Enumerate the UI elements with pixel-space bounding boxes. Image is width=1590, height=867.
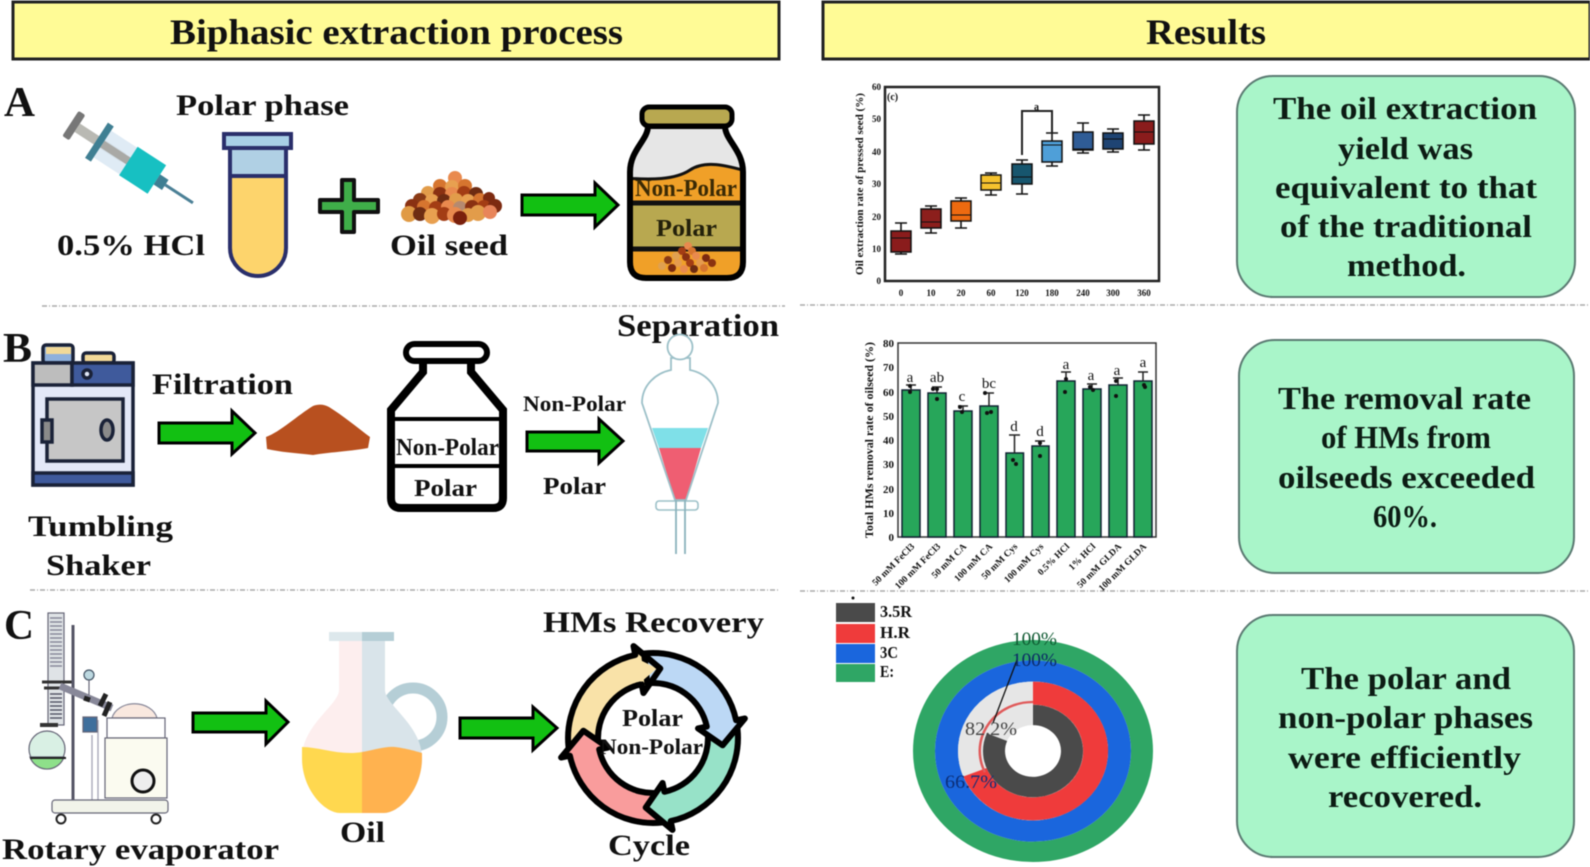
y ticks: 30 (872, 179, 882, 189)
x ticks: 10 (926, 288, 936, 298)
x ticks: 240 (1076, 288, 1090, 298)
x labels: 100 mM CA (953, 542, 995, 584)
y axis label: Total HMs removal rate of oilseed (%) (862, 342, 876, 538)
y ticks: 0 (876, 276, 882, 286)
y ticks: 70 (883, 362, 894, 374)
x ticks: 120 (1015, 288, 1029, 298)
icon: oil jug (302, 632, 442, 813)
icon: plus (320, 180, 378, 232)
header: biphasic extraction process: Biphasic extraction process (170, 12, 623, 52)
label: polar: Polar (543, 474, 606, 500)
x labels: 50 mM Cys (980, 542, 1020, 582)
significance letters: a (1114, 363, 1121, 379)
x labels (871, 542, 1149, 594)
icon: jar with phases (625, 107, 750, 285)
legend (836, 596, 913, 682)
panel B: filtration and separation (3, 307, 779, 582)
label: tumbling shaker: Shaker (46, 549, 151, 582)
icon: separatory funnel (642, 334, 718, 554)
callout: phase recovery: recovered. (1328, 778, 1482, 814)
legend: E: (880, 662, 894, 681)
callout: HMs removal: of HMs from (1321, 419, 1491, 455)
y axis label: Oil extraction rate of pressed seed (%) (855, 93, 866, 275)
label: filtration: Filtration (152, 368, 293, 401)
rings (924, 650, 1142, 852)
error bars (906, 372, 1148, 453)
y ticks (872, 82, 882, 286)
arrow (460, 707, 557, 750)
callout: HMs removal: 60%. (1373, 498, 1437, 534)
legend: 3.5R (880, 602, 913, 621)
significance letters: ab (930, 370, 944, 386)
x ticks: 0 (899, 288, 904, 298)
icon: tumbling shaker (33, 345, 133, 485)
icon: jar with phases: Polar (656, 216, 717, 242)
callout: HMs removal (1239, 340, 1574, 573)
y ticks: 60 (872, 82, 882, 92)
legend: 3C (880, 643, 898, 662)
arrow (527, 419, 623, 463)
icon: bottle: Polar (414, 476, 477, 502)
x labels: 50 mM CA (930, 542, 969, 581)
label: cycle: Cycle (608, 829, 690, 862)
callout: oil extraction yield: of the traditional (1280, 208, 1532, 244)
legend: H.R (880, 623, 911, 642)
icon: bottle: Non-Polar (396, 435, 499, 461)
value labels: 82.2% (965, 719, 1017, 740)
y ticks: 20 (872, 212, 882, 222)
icon: powder pile (266, 405, 370, 455)
radial chart: recovery rates (836, 596, 1142, 852)
bar chart: HMs removal rate (862, 338, 1156, 594)
significance letters: d (1036, 424, 1044, 440)
callout: HMs removal: oilseeds exceeded (1278, 459, 1535, 495)
label: oil seed: Oil seed (390, 229, 508, 262)
significance bracket: a (1034, 102, 1039, 113)
y ticks: 0 (888, 532, 894, 544)
y ticks: 50 (883, 411, 894, 423)
callout: oil extraction yield: equivalent to that (1275, 169, 1537, 205)
x ticks: 300 (1106, 288, 1120, 298)
callout: phase recovery: were efficiently (1288, 739, 1521, 775)
y ticks: 60 (883, 387, 894, 399)
x ticks (899, 288, 1151, 298)
panel tag: (c) (887, 92, 898, 103)
seeds in jar (658, 242, 716, 273)
x labels: 50 mM FeCl3 (871, 542, 917, 588)
label C: C (4, 603, 34, 649)
callout: phase recovery: non-polar phases (1278, 699, 1533, 735)
arrow (159, 411, 255, 454)
significance letters: a (1088, 368, 1095, 384)
value labels: 100% (1012, 629, 1057, 650)
value labels: 100% (1012, 650, 1057, 671)
icon: jar with phases: Non-Polar (635, 176, 737, 202)
icon: syringe (59, 106, 204, 220)
icon: rotary evaporator (29, 613, 168, 824)
y ticks: 20 (883, 484, 894, 496)
box plot: oil extraction rate (855, 82, 1159, 298)
label: HCl: 0.5% HCl (57, 229, 205, 262)
callout: phase recovery (1237, 615, 1574, 857)
label: non-polar: Non-Polar (523, 391, 626, 416)
boxes (891, 115, 1154, 254)
significance letters: bc (982, 376, 996, 392)
x ticks: 360 (1137, 288, 1151, 298)
label: oil: Oil (340, 816, 385, 849)
y ticks (883, 338, 894, 544)
callout: oil extraction yield: The oil extraction (1273, 90, 1537, 126)
data points (908, 377, 1147, 466)
x labels: 100 mM Cys (1003, 542, 1046, 585)
label: cycle center text: Polar (622, 706, 683, 732)
significance letters (907, 355, 1147, 440)
value labels: 66.7% (945, 772, 997, 793)
significance letters: a (1063, 357, 1070, 373)
label: cycle center text: Non-Polar (600, 734, 703, 759)
callout: oil extraction yield (1237, 76, 1575, 297)
y ticks: 50 (872, 114, 882, 124)
label B: B (3, 326, 32, 372)
label: separation: Separation (617, 307, 779, 343)
arrow (522, 183, 618, 227)
callout: oil extraction yield: yield was (1338, 130, 1473, 166)
y ticks: 10 (883, 508, 894, 520)
header: results (823, 2, 1590, 59)
x ticks: 60 (986, 288, 996, 298)
y ticks: 10 (872, 244, 882, 254)
label: cycle center text (600, 706, 703, 759)
x ticks: 180 (1045, 288, 1059, 298)
label: rotary evaporator: Rotary evaporator (2, 833, 279, 866)
panel A: polar phase and oil seed mixing (4, 80, 750, 285)
x ticks: 20 (956, 288, 966, 298)
x labels: 50 mM GLDA (1076, 542, 1124, 591)
y ticks: 80 (883, 338, 894, 350)
callout: HMs removal: The removal rate (1278, 380, 1531, 416)
header: biphasic extraction process (13, 2, 779, 59)
label: tumbling shaker (28, 510, 173, 582)
x labels: 0.5% HCl (1036, 542, 1072, 578)
y ticks: 40 (872, 147, 882, 157)
y ticks: 30 (883, 459, 894, 471)
icon: bottle (391, 344, 503, 508)
value labels (945, 629, 1057, 793)
label: HMs recovery: HMs Recovery (543, 606, 764, 639)
leader line (993, 660, 1017, 723)
callout: oil extraction yield: method. (1347, 247, 1466, 283)
icon: oil seeds (401, 171, 502, 225)
callout: phase recovery: The polar and (1301, 660, 1511, 696)
significance letters: c (959, 389, 966, 405)
icon: recovery cycle (561, 646, 745, 830)
icon: test tube (224, 134, 291, 276)
header: results: Results (1146, 12, 1266, 52)
significance letters: d (1010, 419, 1018, 435)
label: polar phase: Polar phase (176, 89, 349, 122)
x labels: 1% HCl (1067, 542, 1098, 573)
bars (902, 381, 1152, 537)
significance letters: a (907, 370, 914, 386)
x labels: 100 mM GLDA (1097, 542, 1149, 594)
label: tumbling shaker: Tumbling (28, 510, 173, 543)
arrow (193, 701, 288, 744)
significance letters: a (1140, 355, 1147, 371)
y ticks: 40 (883, 435, 894, 447)
label A: A (4, 80, 36, 126)
x labels: 100 mM FeCl3 (894, 542, 943, 592)
significance bracket (1022, 102, 1052, 155)
panel C: recovery (2, 603, 764, 866)
